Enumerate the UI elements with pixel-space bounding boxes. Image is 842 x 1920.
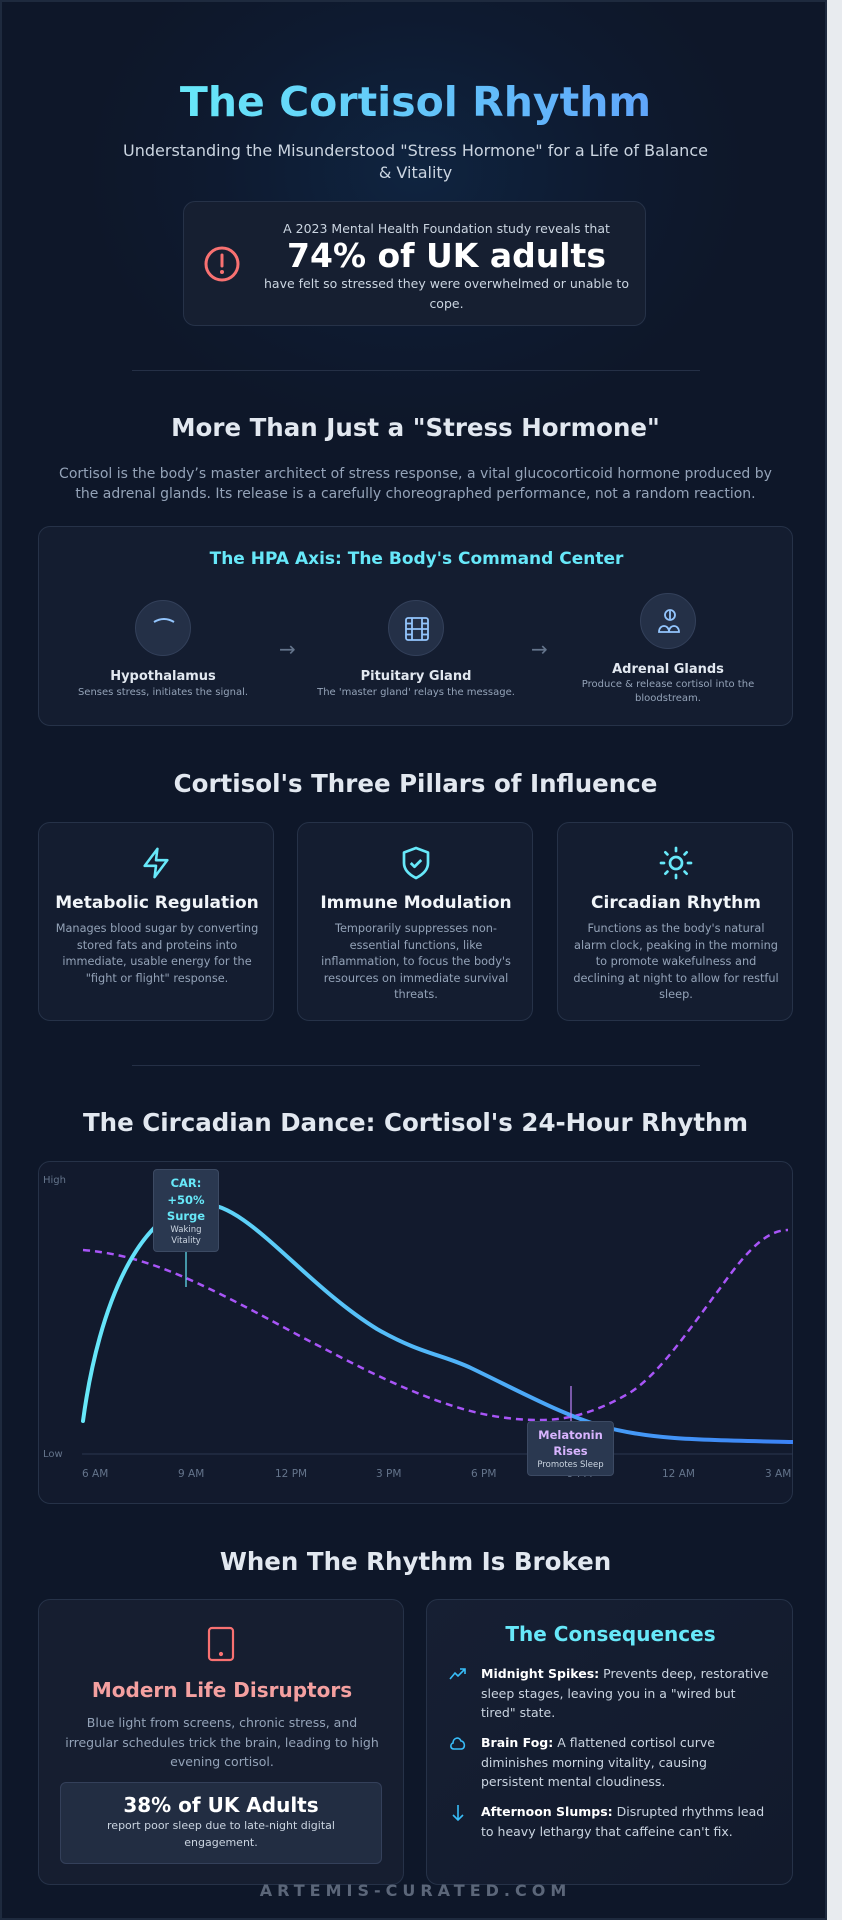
line chart: 12 PM — [275, 1468, 307, 1480]
heading: broken: When The Rhythm Is Broken — [220, 1547, 611, 1576]
card: circadian: Functions as the body's natural — [588, 922, 764, 935]
icon: shield — [402, 846, 430, 880]
step: hypothalamus — [78, 600, 248, 698]
stat text: 74% of UK adults — [287, 236, 606, 275]
heading: pillars: Cortisol's Three Pillars of Influence — [174, 769, 657, 798]
item: midnight spikes: Midnight Spikes: Prevents deep, restorative sleep stages, leaving you in a "wired but tired" state. — [481, 1666, 768, 1720]
callout: melatonin — [527, 1421, 614, 1476]
line chart: 12 AM — [662, 1468, 695, 1480]
stat text — [264, 221, 629, 311]
card: immune: Immune Modulation — [320, 893, 512, 913]
callout: CAR surge: +50% — [167, 1192, 205, 1206]
callout: CAR surge: Waking — [170, 1224, 202, 1234]
callout: CAR surge: Surge — [167, 1209, 205, 1223]
item: afternoon slumps: Afternoon Slumps: Disrupted rhythms lead to heavy lethargy that caffeine can't fix. — [481, 1804, 764, 1838]
card: circadian: sleep. — [659, 988, 693, 1001]
panel: HPA axis — [38, 526, 793, 726]
line chart: 9 AM — [178, 1468, 204, 1480]
HPA title: The HPA Axis: The Body's Command Center — [210, 549, 623, 569]
step: pituitary: The 'master gland' relays the message. — [317, 687, 515, 698]
item: brain fog: Brain Fog: A flattened cortisol curve diminishes morning vitality, causing persistent mental cloudiness. — [481, 1735, 715, 1789]
icon: alert — [204, 246, 240, 282]
card: circadian: alarm clock, peaking in the morning — [574, 938, 778, 952]
panel: consequences: The Consequences — [505, 1622, 716, 1646]
panel: disruptors: Blue light from screens, chronic stress, and irregular schedules trick the brain, leading to high evening cortisol. — [65, 1715, 379, 1769]
callout: CAR surge: Vitality — [171, 1236, 201, 1246]
panel: consequences — [426, 1599, 793, 1885]
subtitle — [123, 141, 708, 182]
icon: phone — [208, 1626, 234, 1662]
line chart — [43, 1175, 793, 1480]
arrow: → — [531, 637, 548, 661]
card: metabolic — [38, 822, 274, 1021]
stat: 38%: 38% of UK Adults — [123, 1793, 319, 1817]
callout: melatonin: Rises — [553, 1444, 588, 1458]
step: adrenal: Produce & release cortisol into the bloodstream. — [582, 679, 754, 704]
stat text: A 2023 Mental Health Foundation study reveals that — [283, 221, 610, 236]
step: pituitary — [317, 600, 515, 698]
arrow: → — [279, 637, 296, 661]
step: adrenal — [582, 593, 754, 704]
step: hypothalamus: Hypothalamus — [110, 669, 216, 684]
title: The Cortisol Rhythm — [180, 78, 651, 126]
card: metabolic: Metabolic Regulation — [55, 893, 259, 913]
card: immune: Temporarily suppresses non-essential functions, like inflammation, to focus the body's resources on immediate survival threats. — [321, 922, 511, 1001]
card: metabolic: Manages blood sugar by converting stored fats and proteins into immediate, usable energy for the "fight or flight" response. — [56, 922, 258, 984]
stat: 38% — [60, 1782, 382, 1864]
line chart: 3 PM — [376, 1468, 401, 1480]
line chart: 9 PM — [567, 1468, 592, 1480]
heading: circadian dance: The Circadian Dance: Cortisol's 24-Hour Rhythm — [83, 1108, 748, 1137]
card: circadian — [557, 822, 793, 1021]
line chart: 3 AM — [765, 1468, 791, 1480]
callout: melatonin: Melatonin — [538, 1428, 603, 1442]
stat: 38%: report poor sleep due to late-night digital engagement. — [107, 1819, 335, 1849]
subtitle: Understanding the Misunderstood "Stress Hormone" for a Life of Balance — [123, 141, 708, 160]
chart panel — [38, 1161, 793, 1504]
stat callout — [183, 201, 646, 326]
callout: CAR surge: CAR: — [171, 1176, 201, 1190]
line chart: High — [43, 1175, 66, 1186]
intro paragraph: Cortisol is the body’s master architect of stress response, a vital glucocorticoid hormone produced by the adrenal glands. Its release is a carefully choreographed performance, not a random reaction. — [59, 466, 772, 502]
step: pituitary: Pituitary Gland — [361, 669, 471, 684]
line chart: 6 AM — [82, 1468, 108, 1480]
line chart: Low — [43, 1449, 63, 1460]
card: immune — [297, 822, 533, 1021]
card: circadian: declining at night to allow for restful — [573, 972, 779, 984]
step: adrenal: Adrenal Glands — [612, 662, 724, 677]
heading: more than: More Than Just a "Stress Hormone" — [171, 413, 660, 442]
card: circadian: to promote wakefulness and — [596, 955, 756, 968]
stat text: have felt so stressed they were overwhelmed or unable to cope. — [264, 276, 629, 311]
subtitle: & Vitality — [379, 163, 452, 182]
icon: sun — [660, 846, 692, 880]
footer: ARTEMIS-CURATED.COM — [260, 1881, 571, 1900]
step: hypothalamus: Senses stress, initiates the signal. — [78, 687, 248, 698]
callout: CAR surge — [153, 1169, 219, 1252]
callout: melatonin: Promotes Sleep — [537, 1460, 604, 1470]
panel: disruptors: Modern Life Disruptors — [92, 1678, 352, 1702]
card: circadian: Circadian Rhythm — [591, 893, 761, 913]
panel: disruptors — [38, 1599, 404, 1885]
line chart: 6 PM — [471, 1468, 496, 1480]
icon: bolt — [143, 848, 169, 878]
